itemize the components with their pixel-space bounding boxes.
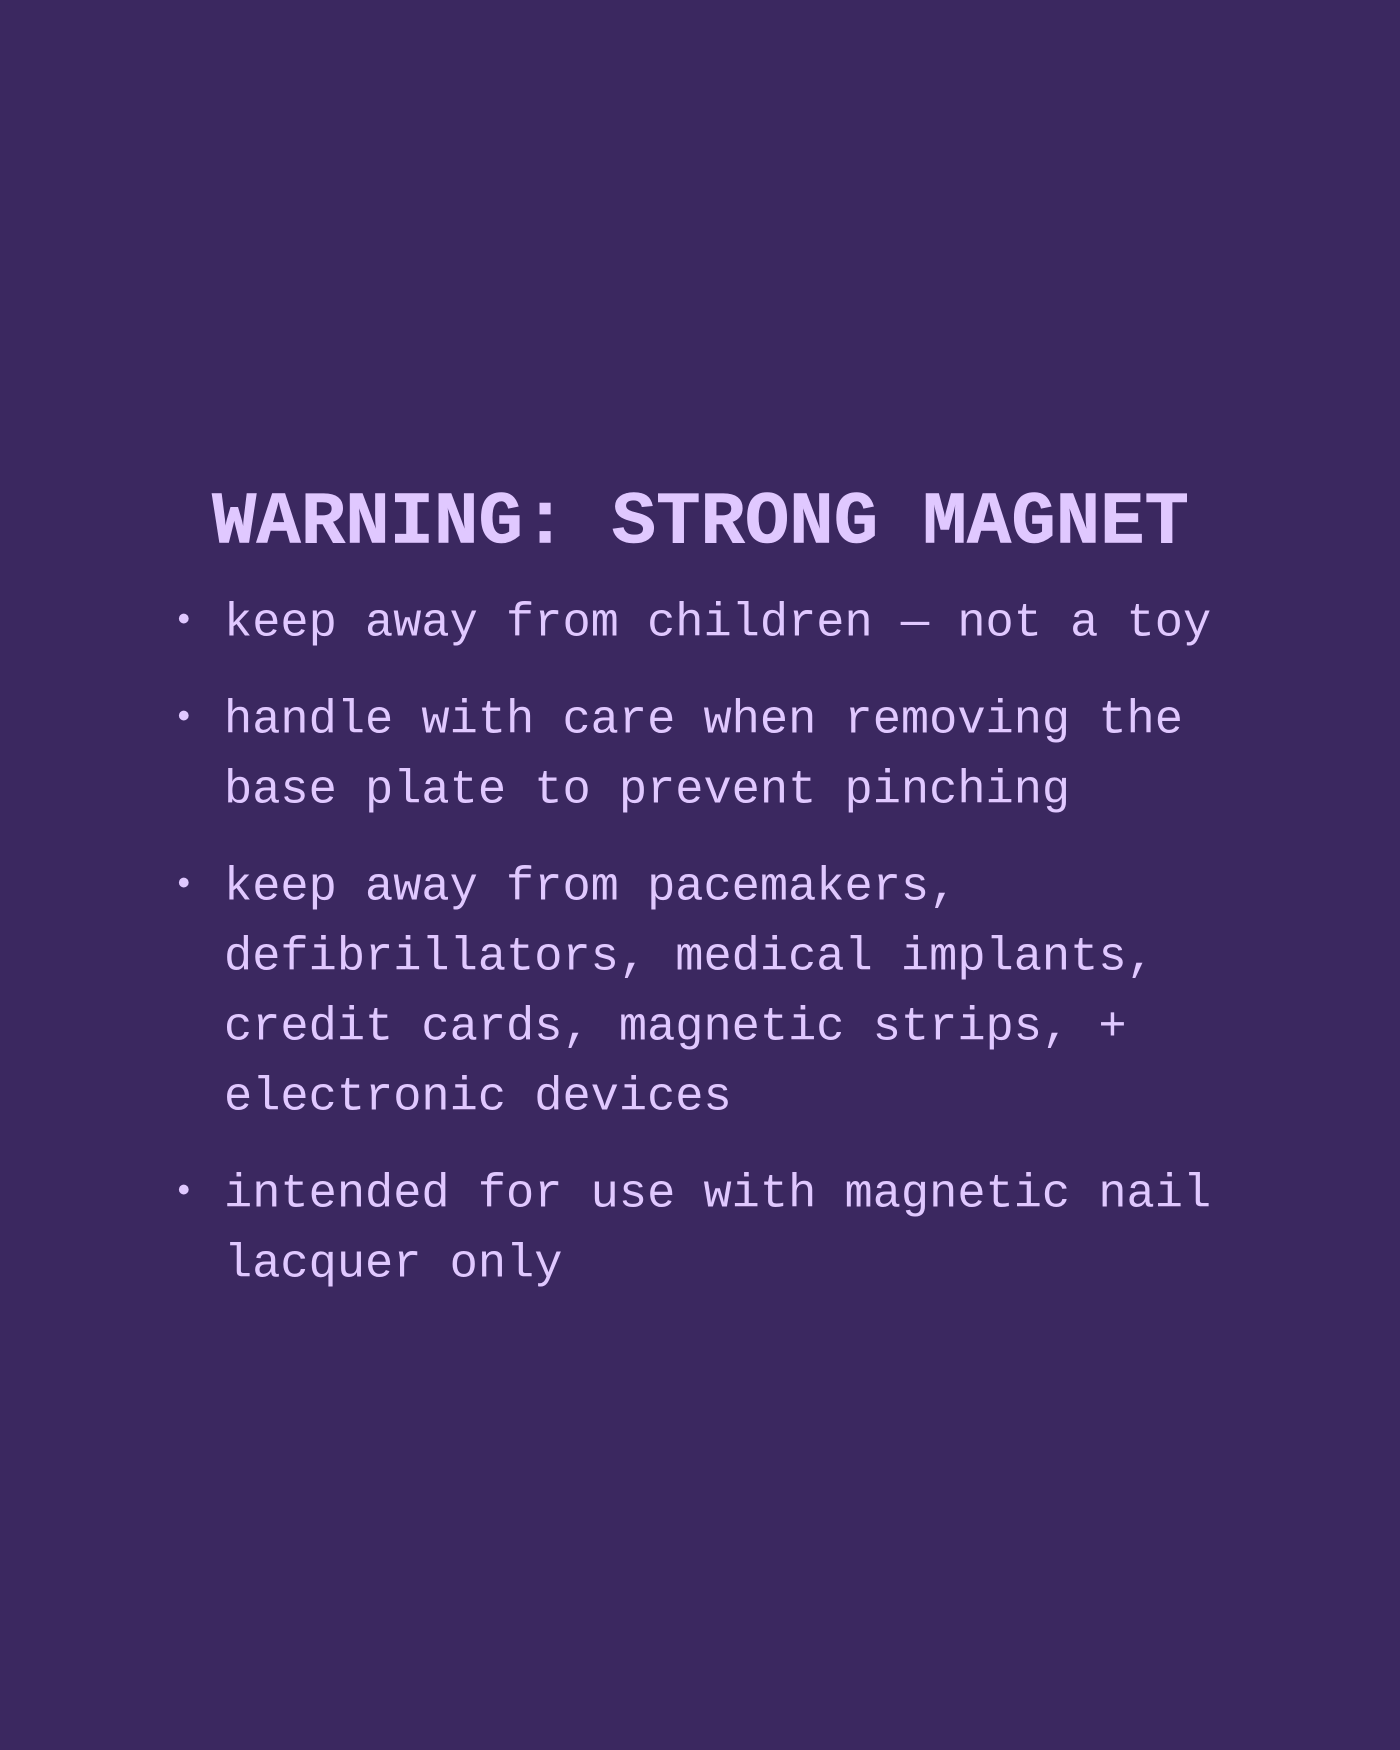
bullet 3: medical and electronic devices: credit cards, magnetic strips, + (224, 1002, 1127, 1054)
bullet 4: intended use (173, 1168, 1211, 1292)
bullet 1: children: • (173, 600, 195, 641)
bullet 1: children: keep away from children — not a toy (224, 598, 1211, 650)
bullet 4: intended use: lacquer only (224, 1238, 562, 1292)
bullet 3: medical and electronic devices: • (173, 864, 195, 905)
bullet 3: medical and electronic devices: defibrillators, medical implants, (224, 932, 1155, 984)
bullet 4: intended use: intended for use with magnetic nail (224, 1168, 1211, 1222)
bullet 3: medical and electronic devices: keep away from pacemakers, (224, 862, 957, 914)
warning list (173, 598, 1211, 1292)
bullet 2: pinching: handle with care when removing the (224, 694, 1183, 748)
bullet 2: pinching: base plate to prevent pinching (224, 764, 1070, 818)
bullet 4: intended use: • (173, 1171, 195, 1212)
bullet 3: medical and electronic devices (173, 862, 1155, 1124)
bullet 3: medical and electronic devices: electronic devices (224, 1072, 732, 1124)
title: WARNING: STRONG MAGNET (212, 482, 1189, 566)
bullet 2: pinching (173, 694, 1183, 818)
bullet 2: pinching: • (173, 697, 195, 738)
